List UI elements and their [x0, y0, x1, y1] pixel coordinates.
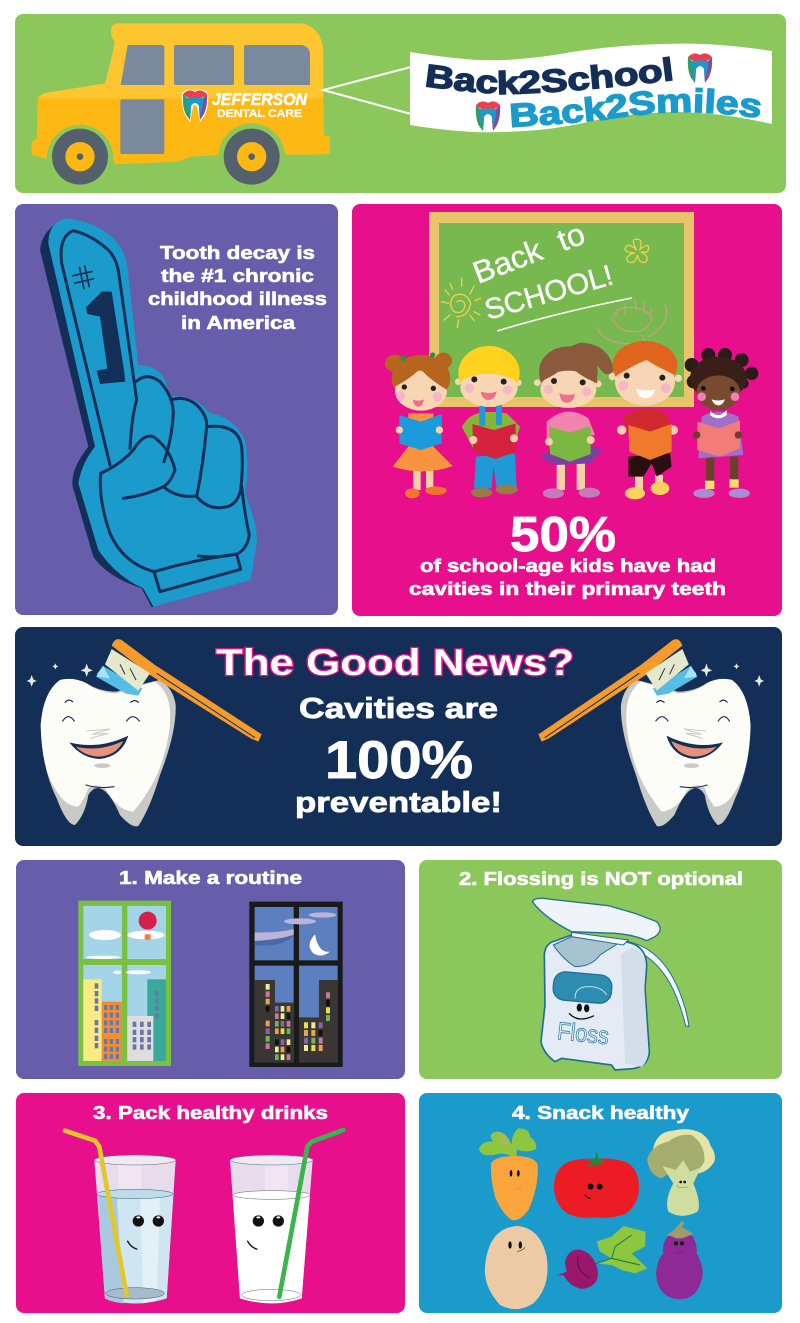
text: tooth decay statement	[148, 242, 327, 333]
chalkboard: SCHOOL!	[481, 260, 617, 327]
icon: floss box: Floss	[556, 1018, 610, 1050]
chalkboard	[429, 212, 694, 407]
text: 50 percent statistic	[409, 508, 726, 599]
panel: tooth decay	[15, 204, 338, 615]
text: cavities are 100 percent preventable: 100%	[325, 731, 473, 790]
kid 3	[534, 343, 614, 498]
icon: Jefferson Dental Care logo	[182, 89, 308, 122]
banner: Back2School Back2Smiles	[410, 44, 772, 132]
kid 1	[385, 352, 453, 498]
banner ropes	[323, 67, 411, 114]
panel: header	[15, 14, 786, 193]
icon: glass of milk	[230, 1130, 343, 1303]
panel: 50 percent cavities	[352, 204, 782, 616]
icon: floss box	[532, 898, 689, 1070]
icon: tooth logo upper	[688, 53, 712, 83]
kid 4	[609, 341, 682, 499]
panel: snack healthy	[419, 1093, 782, 1313]
carrot	[479, 1128, 538, 1220]
icon: day window	[78, 901, 171, 1066]
text: tooth decay statement: in America	[181, 312, 296, 333]
heading: pack healthy drinks: 3. Pack healthy drinks	[93, 1102, 328, 1123]
eggplant	[656, 1221, 703, 1299]
icon: foam finger	[40, 218, 257, 607]
icon: left tooth with toothbrush	[27, 639, 262, 826]
banner: Back2School Back2Smiles: Back2School	[426, 56, 673, 95]
kids reading	[385, 341, 758, 499]
heading: The Good News: The Good News?	[216, 642, 574, 683]
icon: tooth logo lower	[476, 101, 500, 131]
text: 50 percent statistic: cavities in their primary teeth	[409, 578, 726, 599]
text: 50 percent statistic: 50%	[510, 508, 616, 562]
heading: snack healthy: 4. Snack healthy	[512, 1102, 690, 1123]
icon: glass of water	[65, 1131, 176, 1303]
banner: Back2School Back2Smiles: Back2Smiles	[510, 88, 761, 128]
icon: right tooth with toothbrush	[538, 639, 764, 826]
potato	[485, 1226, 548, 1309]
text: cavities are 100 percent preventable: Cavities are	[299, 693, 498, 725]
text: 50 percent statistic: of school-age kids have had	[420, 555, 716, 576]
icon: school bus	[31, 23, 330, 185]
panel: flossing	[419, 860, 782, 1079]
beet	[557, 1226, 647, 1289]
panel: the good news	[15, 627, 782, 846]
kid 2	[455, 346, 522, 497]
icon: Jefferson Dental Care logo: DENTAL CARE	[217, 108, 302, 120]
icon: Jefferson Dental Care logo: JEFFERSON	[212, 90, 308, 109]
text: cavities are 100 percent preventable	[295, 693, 502, 819]
icon: night window	[249, 902, 343, 1067]
heading: flossing is not optional: 2. Flossing is NOT optional	[459, 868, 743, 889]
heading: make a routine: 1. Make a routine	[119, 867, 302, 888]
text: tooth decay statement: Tooth decay is	[160, 242, 315, 263]
kid 5	[685, 348, 758, 498]
panel: healthy drinks	[16, 1093, 405, 1313]
icon: vegetables	[479, 1128, 715, 1309]
text: cavities are 100 percent preventable: preventable!	[295, 787, 502, 819]
panel: make a routine	[16, 860, 405, 1079]
broccoli	[647, 1129, 715, 1216]
tomato	[554, 1151, 639, 1218]
chalkboard: Back to	[468, 216, 590, 291]
text: tooth decay statement: childhood illness	[148, 288, 327, 309]
text: tooth decay statement: the #1 chronic	[161, 265, 314, 286]
